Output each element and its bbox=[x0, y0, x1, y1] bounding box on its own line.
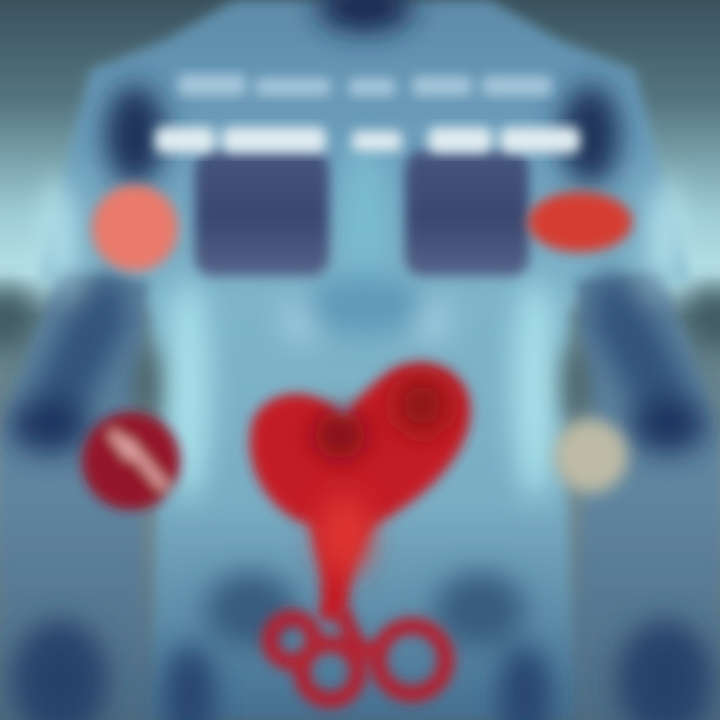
heading: blurred title line two bbox=[155, 127, 580, 153]
icon: salmon circle bbox=[92, 185, 178, 271]
right arm bbox=[570, 270, 720, 720]
icon: heart with vessels bbox=[250, 363, 470, 700]
icon: beige circle bbox=[554, 419, 628, 493]
left arm bbox=[0, 270, 150, 720]
icon: red ellipse bbox=[528, 192, 632, 252]
gaps between arms and torso bbox=[137, 345, 586, 425]
panel: left chest block bbox=[195, 150, 329, 276]
heading: blurred title line one bbox=[178, 74, 552, 96]
background dark patches at sides bbox=[0, 288, 720, 348]
icon: dark red circle bbox=[82, 412, 180, 510]
panel: right chest block bbox=[405, 150, 529, 276]
vessels loops bbox=[270, 610, 446, 700]
